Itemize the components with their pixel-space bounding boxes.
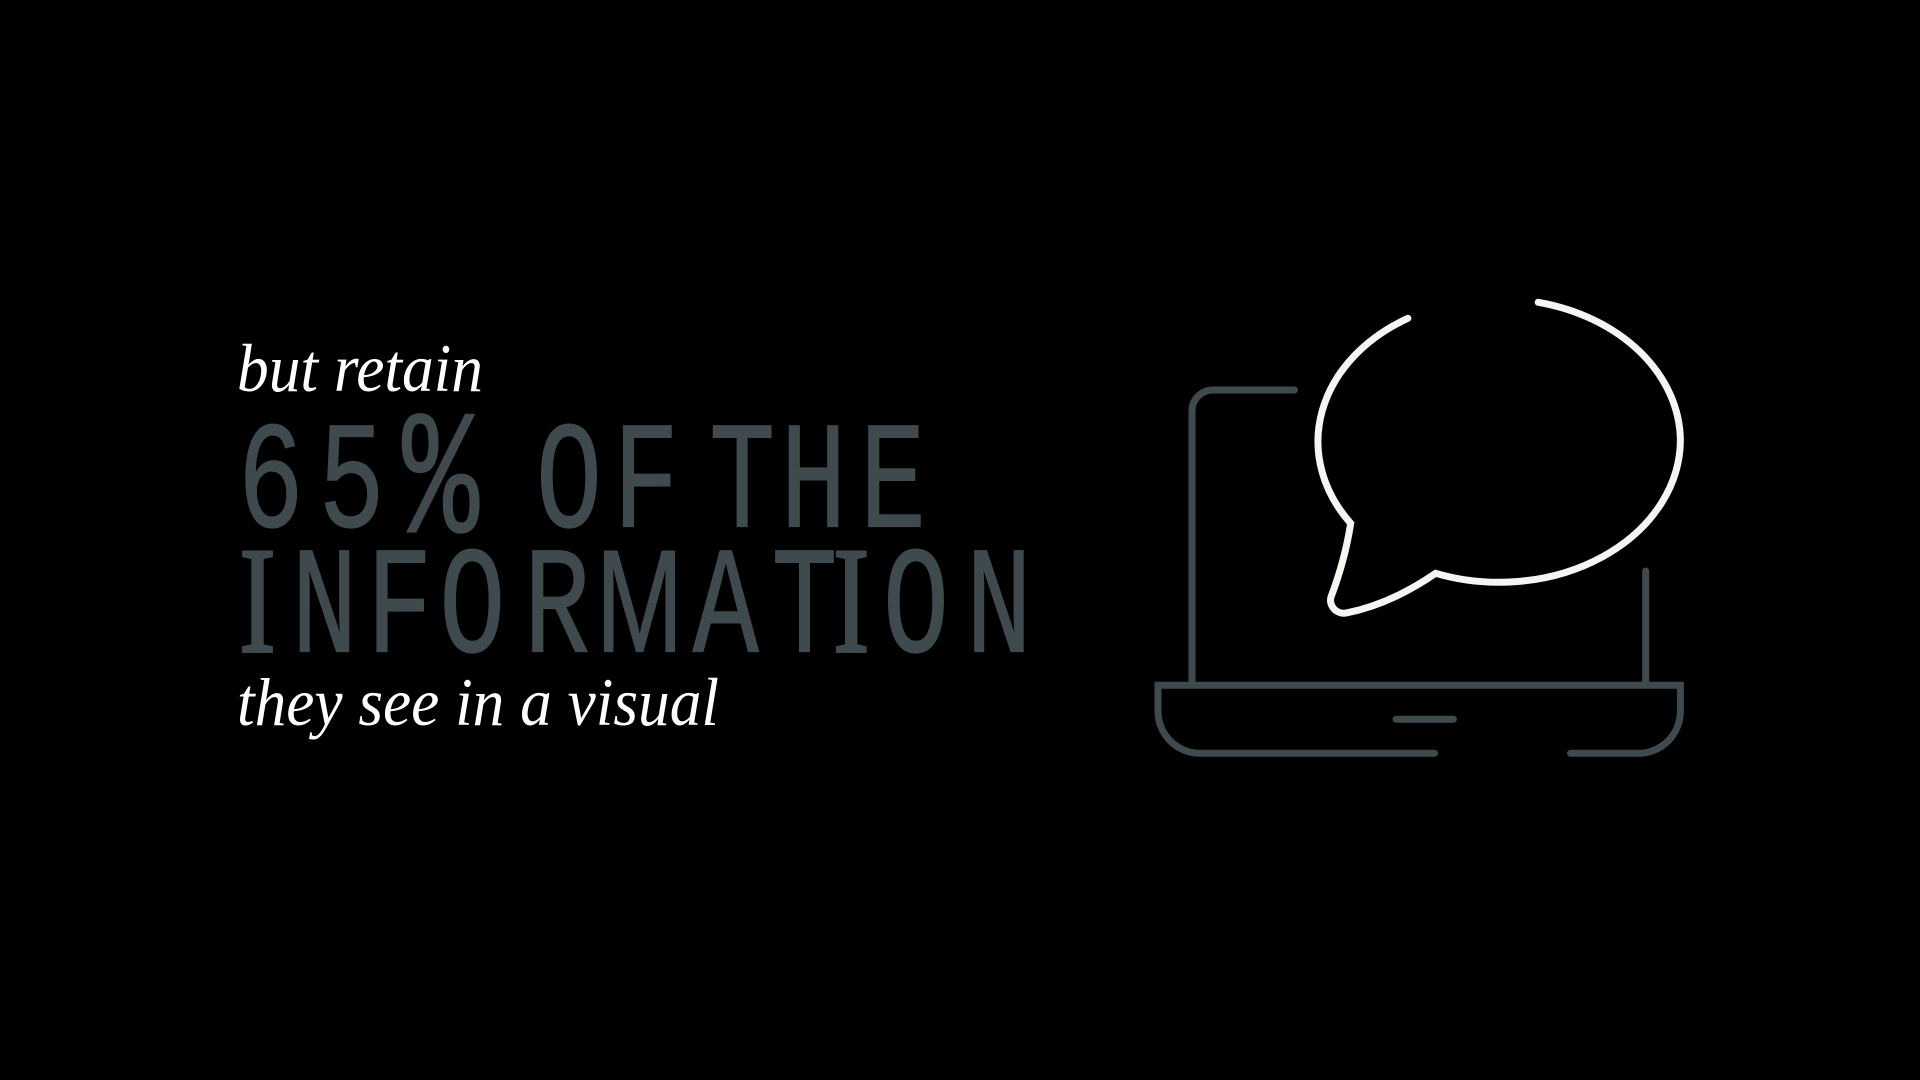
icon: laptop [1158, 390, 1680, 753]
icon: speech bubble [1318, 302, 1680, 613]
text: but retain: but retain [237, 330, 483, 406]
heading: 65% of the: % [402, 384, 480, 586]
heading: 65% of the: 65 [238, 400, 385, 574]
heading: information: INFORMATION [239, 516, 1032, 699]
heading: 65% of the: OF THE [471, 400, 926, 574]
laptop screen left and top edge [1192, 390, 1294, 685]
icon: laptop with speech bubble [1158, 302, 1680, 753]
text block: statistic [237, 330, 1032, 740]
laptop base [1158, 685, 1680, 753]
laptop screen right edge [1642, 571, 1649, 685]
text: they see in a visual: they see in a visual [237, 664, 719, 740]
laptop trackpad [1396, 716, 1454, 723]
